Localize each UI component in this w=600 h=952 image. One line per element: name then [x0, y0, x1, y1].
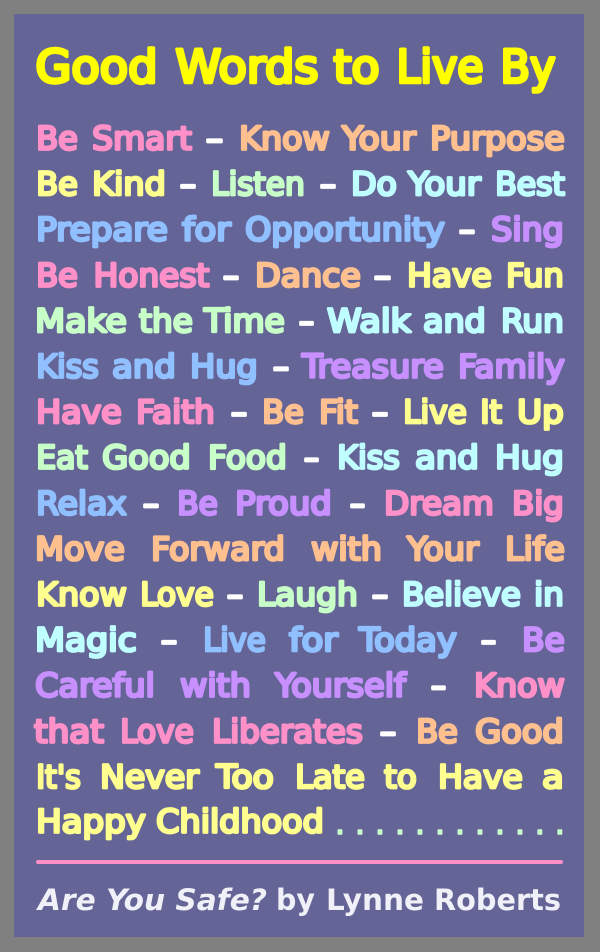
poem line 4: Honest — [94, 256, 209, 294]
poem line 9: – — [350, 484, 365, 522]
poem line 5: Walk — [327, 302, 411, 340]
poem line 7: Fit — [319, 393, 358, 431]
poem line 2: – — [180, 165, 196, 203]
poem line 6: and — [112, 348, 176, 386]
title: By — [500, 40, 556, 94]
poem line 5: Time — [203, 302, 285, 340]
poem line 2: Kind — [92, 165, 166, 203]
poem line 1: – — [206, 120, 223, 158]
poem line 16 with dot leader — [36, 802, 575, 842]
poem line 7: – — [231, 393, 247, 431]
poem line 8 — [36, 439, 564, 477]
poem line 9: Be — [177, 484, 218, 522]
poem line 12 — [35, 621, 565, 659]
poem line 6 — [36, 348, 565, 386]
poem line 13: Yourself — [274, 667, 407, 705]
poem line 11: Love — [140, 576, 214, 614]
poem line 4: Have — [407, 256, 492, 294]
credit line — [36, 883, 561, 917]
poem line 14: Be — [416, 712, 458, 750]
poem line 6: – — [273, 348, 289, 386]
poem line 15 — [36, 758, 564, 796]
poem line 16 with dot leader: Childhood — [156, 802, 324, 840]
poem line 1: Your — [341, 120, 417, 158]
poem line 10 — [35, 530, 565, 568]
title: to — [334, 40, 380, 94]
poem line 13: Careful — [35, 667, 155, 705]
poem line 15: Late — [295, 758, 365, 796]
poem line 14: that — [34, 712, 104, 750]
poem line 8: Hug — [495, 439, 564, 477]
poem line 11: – — [372, 576, 388, 614]
credit line: Lynne — [326, 883, 424, 917]
poem line 11 — [36, 576, 564, 614]
poem line 1: Know — [239, 120, 330, 158]
poem line 7: It — [480, 393, 502, 431]
poem line 7 — [36, 393, 564, 431]
poem line 15: a — [542, 758, 564, 796]
poem line 6: Family — [458, 348, 565, 386]
poem line 4: – — [223, 256, 239, 294]
poem line 15: It's — [36, 758, 81, 796]
poem line 15: to — [384, 758, 417, 796]
poem line 3: – — [459, 211, 475, 249]
poem line 15: Too — [215, 758, 274, 796]
poem line 15: Never — [100, 758, 200, 796]
poem line 7: Faith — [136, 393, 215, 431]
poem line 8: and — [415, 439, 479, 477]
poem line 8: Food — [208, 439, 287, 477]
poem line 11: Know — [36, 576, 127, 614]
poem line 9 — [36, 484, 564, 522]
poem line 15: Have — [438, 758, 523, 796]
poem line 11: in — [534, 576, 564, 614]
poem line 13: – — [431, 667, 446, 705]
title: Good — [36, 40, 158, 94]
poem line 12: Today — [358, 621, 457, 659]
poem line 7: Be — [262, 393, 304, 431]
poem line 5: Run — [501, 302, 564, 340]
poem line 14 — [34, 712, 564, 750]
poem line 11: Laugh — [257, 576, 358, 614]
poem line 16 with dot leader: Happy — [36, 802, 146, 840]
poem line 4: Dance — [255, 256, 361, 294]
credit line: by — [276, 883, 315, 917]
poem line 9: Relax — [36, 484, 127, 522]
divider line — [36, 860, 563, 864]
poem line 10: Your — [406, 530, 480, 568]
poem line 5: and — [423, 302, 486, 340]
credit line: Roberts — [434, 883, 561, 917]
poem line 5: – — [299, 302, 314, 340]
poem line 8: Eat — [36, 439, 88, 477]
poem line 2: Your — [407, 165, 482, 203]
poem line 12: – — [161, 621, 177, 659]
poem line 3: for — [182, 211, 232, 249]
poem line 3 — [36, 211, 564, 249]
poem line 7: Live — [403, 393, 467, 431]
poem line 12: Be — [522, 621, 565, 659]
poem line 7: Up — [517, 393, 564, 431]
title: Live — [396, 40, 484, 94]
poem line 10: Move — [35, 530, 125, 568]
poem line 10: Life — [505, 530, 565, 568]
poem line 3: Opportunity — [245, 211, 445, 249]
poem line 2: Best — [495, 165, 565, 203]
poem line 12: Magic — [35, 621, 137, 659]
poem line 1: Purpose — [430, 120, 565, 158]
poem line 2: – — [320, 165, 336, 203]
poem line 5: Make — [35, 302, 127, 340]
poem line 2: Be — [36, 165, 78, 203]
poem line 14: Love — [120, 712, 194, 750]
poem line 11: Believe — [402, 576, 521, 614]
poem line 6: Treasure — [301, 348, 444, 386]
poem line 8: – — [304, 439, 319, 477]
poem line 14: – — [380, 712, 396, 750]
poem line 10: Forward — [151, 530, 285, 568]
poem line 3: Prepare — [36, 211, 168, 249]
poem line 4 — [36, 256, 564, 294]
poem line 9: Proud — [235, 484, 332, 522]
poem line 13: Know — [474, 667, 565, 705]
poem line 1: Smart — [92, 120, 192, 158]
poem line 9: – — [143, 484, 159, 522]
poem line 13 — [35, 667, 565, 705]
poem line 11: – — [227, 576, 243, 614]
poem line 12: Live — [203, 621, 266, 659]
poem line 12: – — [481, 621, 496, 659]
poem line 6: Hug — [190, 348, 258, 386]
poem line 7: Have — [36, 393, 122, 431]
poem line 10: with — [311, 530, 382, 568]
credit line: Are You Safe? — [36, 883, 267, 917]
poem line 9: Dream — [384, 484, 494, 522]
title: Words — [176, 40, 318, 94]
poem line 7: – — [372, 393, 388, 431]
poem line 9: Big — [512, 484, 564, 522]
poem line 13: with — [180, 667, 251, 705]
poem line 4: Be — [36, 256, 78, 294]
poem line 2: Listen — [211, 165, 305, 203]
poem line 8: Kiss — [337, 439, 400, 477]
poem line 16 with dot leader: ............ — [335, 804, 575, 842]
poem line 3: Sing — [491, 211, 564, 249]
poem line 5 — [35, 302, 564, 340]
poem line 1: Be — [36, 120, 78, 158]
poem line 8: Good — [102, 439, 191, 477]
poem line 5: the — [139, 302, 193, 340]
title — [36, 40, 556, 94]
poem line 14: Liberates — [212, 712, 363, 750]
poem line 4: – — [374, 256, 391, 294]
poem line 2: Do — [351, 165, 397, 203]
poem line 12: for — [289, 621, 339, 659]
poem line 4: Fun — [506, 256, 564, 294]
poem line 14: Good — [475, 712, 564, 750]
poem line 6: Kiss — [36, 348, 99, 386]
poem line 2 — [36, 165, 565, 203]
poem line 1 — [36, 120, 565, 158]
